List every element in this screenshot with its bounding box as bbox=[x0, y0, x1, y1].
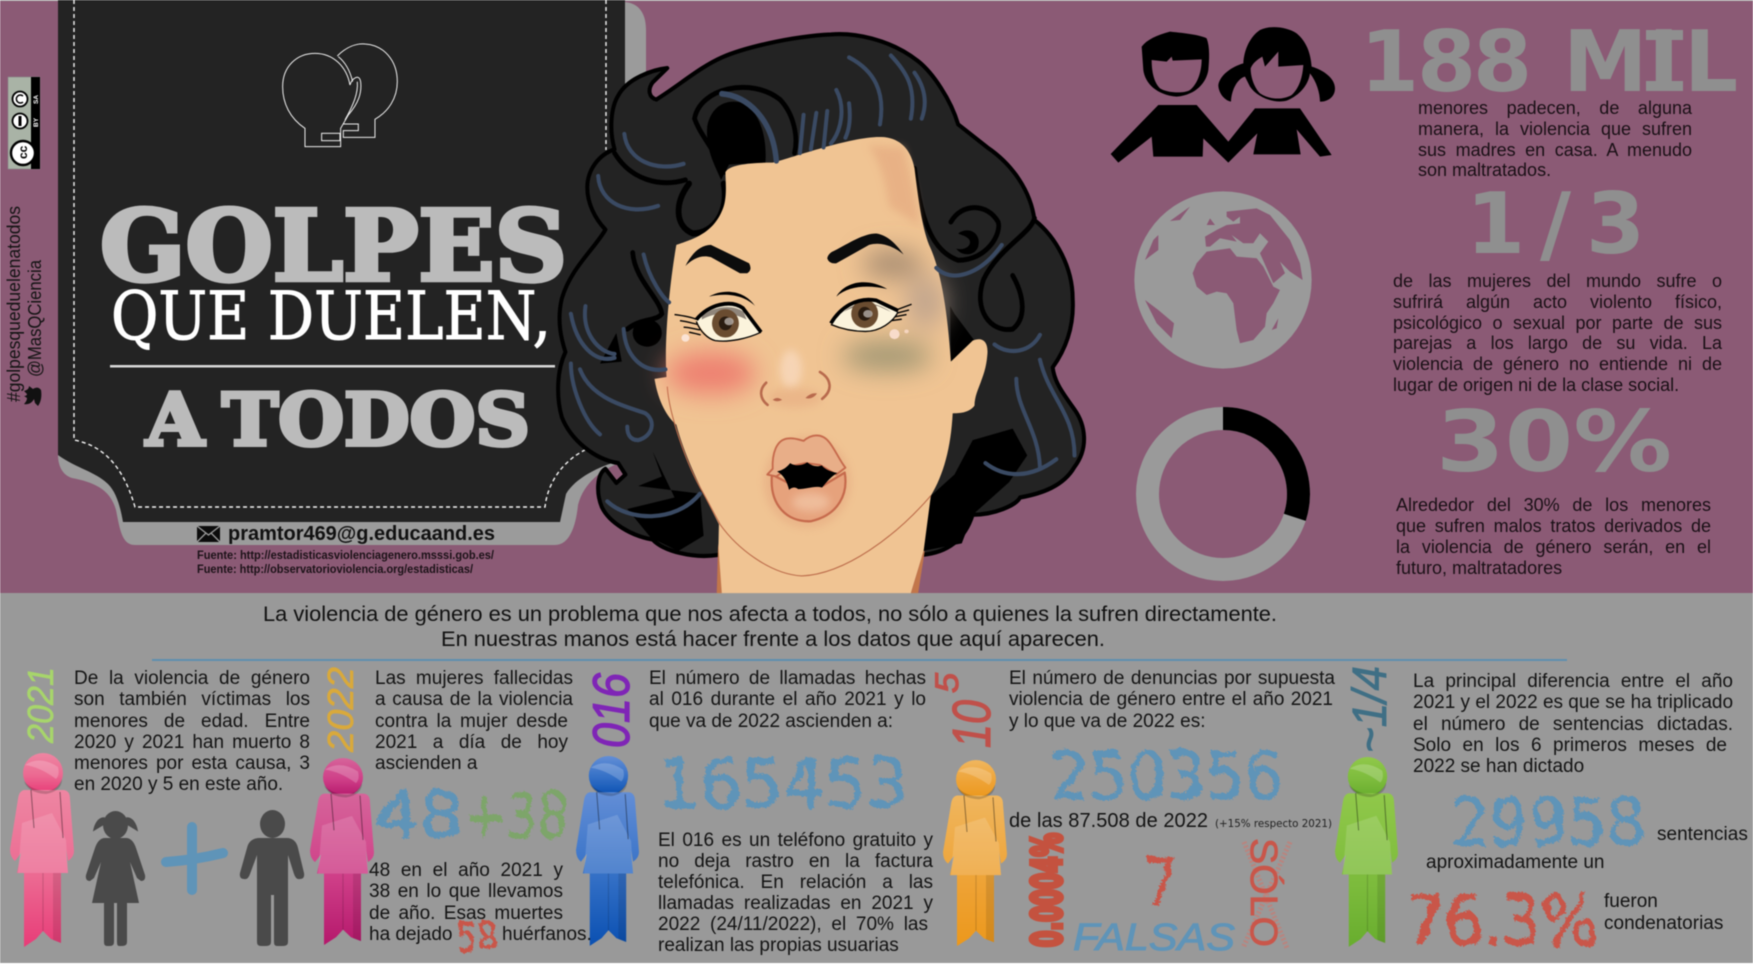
source lines bbox=[197, 548, 495, 576]
text: reports: violencia de género entre el año 2021 bbox=[1009, 689, 1333, 710]
text: women killed bbox=[375, 668, 574, 774]
text: fueron condenatorias: condenatorias bbox=[1604, 913, 1723, 934]
label: 016: 016 bbox=[583, 673, 641, 748]
text: about the 016 line: no deja rastro en la factura bbox=[658, 851, 933, 872]
bruises bbox=[842, 251, 945, 370]
forehead shade bbox=[867, 145, 920, 226]
label: 10 to the 5: 5 bbox=[929, 673, 965, 693]
text: reports: y lo que va de 2022 es: bbox=[1009, 711, 1205, 732]
hair outer silhouette bbox=[558, 34, 1084, 556]
text: deaths and orphans: de año. Esas muertes bbox=[369, 903, 563, 924]
right eye bbox=[831, 282, 912, 331]
contact email: pramtor469@g.educaand.es bbox=[228, 523, 495, 545]
text: calls to 016: que va de 2022 ascienden a: bbox=[649, 711, 893, 732]
text: calls to 016: al 016 durante el año 2021 y lo bbox=[649, 689, 926, 710]
source lines: Fuente: http://estadisticasviolenciagenero.msssi.gob.es/ bbox=[197, 548, 495, 562]
text: minors killed: son también víctimas los bbox=[74, 689, 310, 710]
stat: 1/3: 1/3 bbox=[1466, 175, 1645, 274]
jaw line bbox=[667, 387, 931, 576]
chart: donut 30% bbox=[1148, 418, 1298, 570]
figure: green woman bbox=[1335, 757, 1398, 947]
chalk number: 165453: 165453 bbox=[658, 745, 908, 824]
text: minors killed: menores por esta causa, 3 bbox=[74, 753, 310, 774]
text: women killed: a causa de la violencia bbox=[375, 689, 573, 710]
text: 188 mil description: son maltratados. bbox=[1418, 160, 1551, 180]
text: sentences: 2022 se han dictado bbox=[1413, 756, 1584, 777]
icon: Creative Commons badge: cc bbox=[16, 145, 30, 159]
label: 10 to the 5: 10 bbox=[942, 700, 1002, 748]
text: 30% description: Alrededor del 30% de los menores bbox=[1396, 495, 1711, 515]
chalk number: 48+38 bbox=[375, 780, 569, 854]
text: about the 016 line: realizan las propias usuarias bbox=[658, 935, 899, 956]
text: about the 016 line: 2022 (24/11/2022), el 70% las bbox=[658, 914, 928, 935]
title: A TODOS: A bbox=[145, 377, 205, 462]
text: 188 mil description: sus madres en casa. A menudo bbox=[1418, 140, 1692, 160]
source lines: Fuente: http://observatorioviolencia.org/estadisticas/ bbox=[197, 562, 474, 576]
text: 1/3 description: parejas a los largo de su vida. La bbox=[1393, 333, 1722, 353]
text: women killed: ascienden a bbox=[375, 753, 477, 774]
text: 188 mil description: manera, la violencia que sufren bbox=[1418, 119, 1692, 139]
panel: title plaque bbox=[58, 0, 625, 522]
mouth bbox=[764, 435, 851, 528]
text: sentences: 2021 y el 2022 es que se ha triplicado bbox=[1413, 692, 1733, 713]
icon: Creative Commons badge: BY bbox=[33, 117, 40, 127]
headline statement bbox=[263, 602, 1277, 651]
icon: boy silhouette bbox=[240, 810, 304, 946]
text: minors killed bbox=[74, 668, 310, 795]
hair curl outlines bbox=[615, 87, 1034, 330]
icon: Creative Commons badge bbox=[8, 77, 40, 169]
text: deaths and orphans: 48 en el año 2021 y bbox=[369, 860, 563, 881]
text: women killed: 2021 a día de hoy bbox=[375, 732, 568, 753]
text: fueron condenatorias: fueron bbox=[1604, 891, 1658, 912]
text: 188 mil description: menores padecen, de alguna bbox=[1418, 98, 1692, 118]
text: calls to 016 bbox=[649, 668, 926, 732]
text: minors killed: 2020 y 2021 han muerto 8 bbox=[74, 732, 310, 753]
text: 1/3 description: lugar de origen ni de la clase social. bbox=[1393, 375, 1679, 395]
figure: blue woman 016 bbox=[576, 756, 639, 946]
background: grey lower band bbox=[0, 593, 1753, 963]
crossed out word: SOLO: SÓLO bbox=[1242, 838, 1285, 947]
text: women killed: contra la mujer desde bbox=[375, 711, 568, 732]
text: 1/3 description bbox=[1392, 271, 1722, 396]
chalk number: 7: 7 bbox=[1144, 845, 1179, 924]
icon: globe bbox=[1134, 191, 1312, 369]
icon: girl silhouette bbox=[86, 811, 145, 946]
vertical stat: 0.0004%: 0.0004% bbox=[1025, 833, 1071, 947]
text: reports bbox=[1008, 668, 1336, 732]
face and neck bbox=[655, 137, 988, 593]
text: minors killed: en 2020 y 5 en este año. bbox=[74, 774, 283, 795]
text: fueron condenatorias bbox=[1604, 891, 1724, 934]
eye sparkles bbox=[681, 334, 689, 342]
chalk number: 250356: 250356 bbox=[1050, 738, 1283, 815]
word: FALSAS: FALSAS bbox=[1073, 917, 1235, 959]
chalk number: 76.3%: 76.3% bbox=[1406, 880, 1598, 962]
text: 1/3 description: violencia de género no entiende ni de bbox=[1393, 354, 1722, 374]
text: 1/3 description: de las mujeres del mundo sufre o bbox=[1393, 271, 1722, 291]
title: A TODOS: TODOS bbox=[222, 377, 530, 462]
icon: children holding hands bbox=[1111, 27, 1335, 163]
text: reports: El número de denuncias por supuesta bbox=[1009, 668, 1335, 689]
panel: title plaque shadow bbox=[58, 2, 646, 545]
text: sentences bbox=[1413, 671, 1733, 777]
text: sentences: Solo en los 6 primeros meses de bbox=[1413, 735, 1727, 756]
label: about one quarter: ~1/4 bbox=[1344, 666, 1397, 753]
text: about the 016 line: El 016 es un teléfono gratuito y bbox=[658, 830, 933, 851]
chalk number: 58: 58 bbox=[456, 915, 498, 959]
nose bbox=[761, 350, 830, 408]
text: minors killed: menores de edad. Entre bbox=[74, 711, 310, 732]
label: 10 to the 5 bbox=[929, 673, 1002, 748]
title: QUE DUELEN: QUE DUELEN, bbox=[111, 278, 551, 355]
text: calls to 016: El número de llamadas hechas bbox=[649, 668, 926, 689]
figure: magenta woman 2022 bbox=[310, 758, 374, 945]
neck shadow bbox=[717, 543, 925, 593]
text: about the 016 line: telefónica. En relación a las bbox=[658, 872, 933, 893]
stat: 30%: 30% bbox=[1436, 393, 1672, 492]
eyebrows bbox=[685, 233, 904, 273]
hair dark shapes bbox=[600, 102, 1027, 551]
vertical twitter handle: @MasQCiencia bbox=[24, 259, 45, 377]
stat: 188 MIL: 188 MIL bbox=[1360, 13, 1738, 112]
vertical hashtag: #golpesqueduelenatodos bbox=[3, 206, 24, 402]
small note: increase vs 2021: (+15% respecto 2021) bbox=[1215, 817, 1332, 830]
background: mauve upper band bbox=[0, 0, 1753, 594]
text: 30% description: que sufren malos tratos derivados de bbox=[1396, 516, 1711, 536]
label: 2022: 2022 bbox=[320, 667, 361, 753]
text: 1/3 description: psicológico o sexual por parte de sus bbox=[1393, 312, 1722, 332]
icon: mail envelope bbox=[197, 526, 220, 542]
blush bbox=[665, 352, 756, 394]
upper lip bbox=[767, 435, 845, 476]
text: 188 mil description bbox=[1418, 98, 1692, 180]
text: sentencias: sentencias bbox=[1657, 824, 1748, 845]
icon: Creative Commons badge: SA bbox=[33, 95, 40, 104]
text: minors killed: De la violencia de género bbox=[74, 668, 310, 689]
icon: boxing gloves bbox=[283, 44, 397, 147]
figure: pink woman 2021 bbox=[10, 753, 74, 947]
chalk number: 29958: 29958 bbox=[1450, 784, 1646, 861]
hair highlights bbox=[571, 55, 1074, 516]
icon: chalk plus bbox=[166, 827, 223, 890]
figure: orange woman bbox=[943, 760, 1007, 946]
text: deaths and orphans: 38 en lo que llevamos bbox=[369, 881, 563, 902]
text: 30% description: la violencia de género serán, en el bbox=[1396, 537, 1711, 557]
text: sentences: La principal diferencia entre el año bbox=[1413, 671, 1733, 692]
icon: twitter bird bbox=[24, 386, 41, 406]
text: women killed: Las mujeres fallecidas bbox=[375, 668, 573, 689]
text: deaths and orphans bbox=[368, 860, 592, 945]
text: about the 016 line: llamadas realizadas en 2021 y bbox=[658, 893, 933, 914]
headline statement: En nuestras manos está hacer frente a los datos que aquí aparecen. bbox=[441, 627, 1105, 651]
chalk number: 48+38: 48 bbox=[375, 780, 464, 854]
text: 30% description: futuro, maltratadores bbox=[1396, 558, 1562, 578]
text: 1/3 description: sufrirá algún acto violento físico, bbox=[1393, 292, 1722, 312]
left eye bbox=[675, 292, 761, 341]
lower lip bbox=[772, 473, 845, 521]
text: aproximadamente un: aproximadamente un bbox=[1426, 852, 1604, 873]
mouth opening bbox=[777, 462, 837, 490]
text: deaths and orphans: ha dejado huérfanos. bbox=[369, 924, 592, 945]
headline statement: La violencia de género es un problema que nos afecta a todos, no sólo a quienes la sufren directamente. bbox=[263, 602, 1277, 626]
title: GOLPES: GOLPES bbox=[100, 189, 567, 303]
text: de las 87.508 de 2022: de las 87.508 de 2022 bbox=[1009, 810, 1208, 832]
icon: woman face illustration bbox=[558, 34, 1084, 593]
label: 2021: 2021 bbox=[20, 667, 61, 744]
text: 30% description bbox=[1396, 495, 1711, 578]
chalk number: 48+38: +38 bbox=[464, 780, 569, 854]
text: sentences: el número de sentencias dictadas. bbox=[1413, 714, 1733, 735]
text: about the 016 line bbox=[658, 830, 934, 956]
